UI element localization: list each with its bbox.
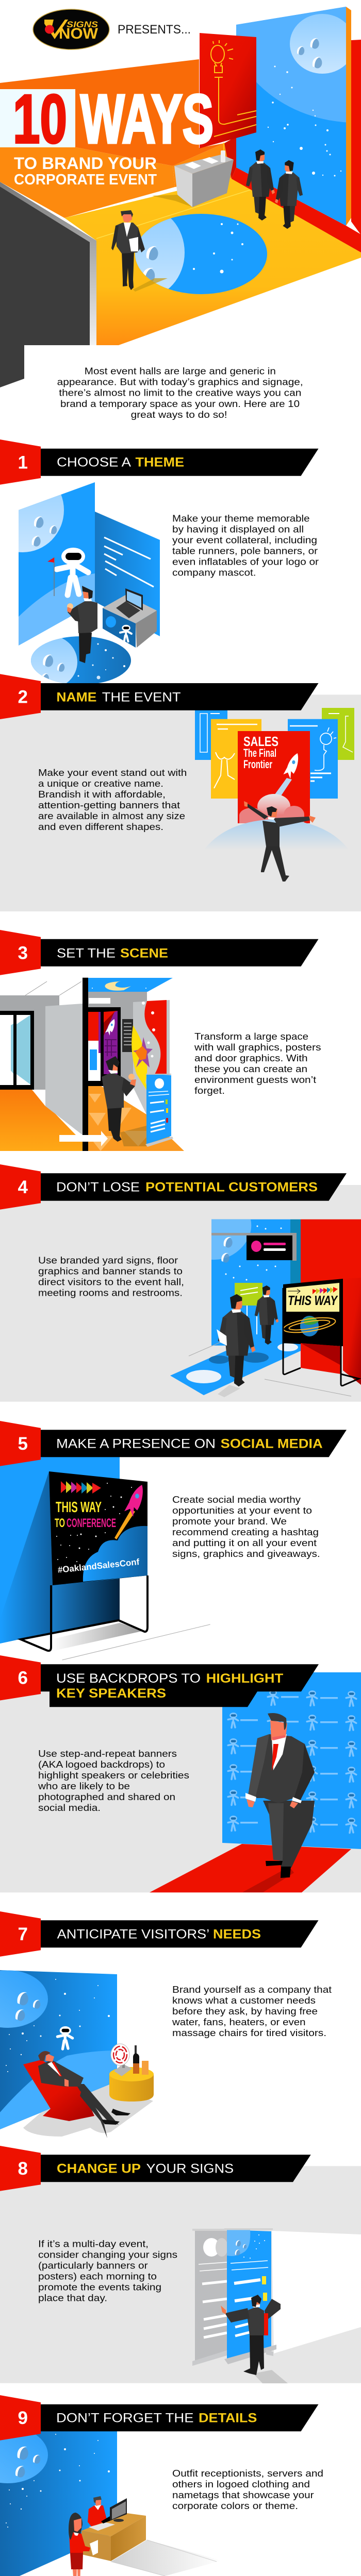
right theme wall with lines [95,512,160,636]
black banner: #OaklandSalesConf [57,1557,140,1575]
text 7: before they ask, by having free [172,2006,318,2016]
banner frame [21,1575,147,1651]
heading 4: 4 [18,1177,28,1197]
side table [109,2061,154,2102]
red wall [301,1219,361,1343]
text 3: with wall graphics, posters [194,1042,321,1053]
text 7: Brand yourself as a company that [172,1985,332,1995]
text 7: knows what a customer needs [172,1995,316,2006]
arrows [61,1481,101,1494]
text 8: place that day. [38,2293,107,2303]
heading 9: DETAILS [199,2411,257,2426]
glass [142,2061,149,2075]
text 1: by having it displayed on all [172,524,304,535]
heading 2: THE EVENT [102,690,180,705]
text 9 [172,2468,323,2511]
blue banner [224,2228,276,2364]
heading 3: SET THE [57,946,116,960]
red sign panel with light bulb [200,33,256,152]
flag [47,557,54,596]
wall shadow [0,1471,53,1643]
heading 6: HIGHLIGHT [206,1671,283,1686]
text 7 [172,1985,332,2038]
text 9: corporate colors or theme. [172,2501,298,2511]
illustration 2: banners [195,708,354,882]
title [0,81,214,188]
blue cloud [83,1526,147,1582]
intro paragraph: there’s almost no limit to the creative ways you can [59,388,301,398]
space wall [0,2421,117,2576]
businessman facing wall [246,149,275,221]
intro paragraph: brand a temporary space as your own. Here are 10 [60,399,300,409]
floor shadow [23,2084,153,2137]
left theme wall [19,482,95,646]
man shadow [133,278,168,292]
text 1: Make your theme memorable [172,514,309,524]
dark grey wall [0,182,96,387]
heading 4 [0,1164,347,1210]
red banner [238,731,310,823]
text 3: forget. [194,1086,225,1096]
text 1: table runners, pole banners, or [172,546,318,556]
man at back [255,1285,278,1345]
heading 4: DON’T LOSE [56,1180,140,1194]
text 4: direct visitors to the event hall, [38,1277,184,1287]
text 6: who are likely to be [38,1781,130,1791]
astronaut [57,2026,73,2049]
text 4 [38,1256,184,1298]
back wall over door [88,992,147,1086]
floor line [62,1624,210,1660]
heading 9 [0,2395,319,2441]
heading 5: SOCIAL MEDIA [221,1436,323,1451]
teal strip [290,1219,301,1346]
businessman front [111,210,145,290]
lower backing panel [53,1579,120,1632]
text 6 [38,1749,189,1813]
orange floor left [0,1090,83,1151]
blue wall [0,1453,120,1643]
grey banner [192,2229,228,2366]
text 5: promote your brand. We [172,1516,287,1527]
text 7: massage chairs for tired visitors. [172,2028,326,2038]
floor walkway [170,1326,351,1396]
heading 4: POTENTIAL CUSTOMERS [145,1180,318,1194]
man with cup [102,1056,136,1142]
astronaut logos [228,1690,356,1833]
illustration 5: social media banner [0,1453,210,1660]
text 2: and even different shapes. [38,822,163,832]
text 1 [172,514,319,578]
heading 2: NAME [56,690,96,705]
paper [217,1329,227,1346]
title: 10 [13,81,67,158]
text 1: even inflatables of your logo or [172,557,319,567]
step and repeat backdrop [222,1672,361,1849]
illustration 8: changing banners [192,2228,288,2383]
text 8: (particularly banners or [38,2261,148,2271]
text 5: and putting it on all your event [172,1538,317,1548]
grey pillar [45,1004,83,1135]
text 2: Brandish it with affordable, [38,789,166,800]
text 4: meeting rooms and restrooms. [38,1288,183,1298]
blue banner left [195,708,227,760]
roll-up banner [145,1074,173,1147]
text 6: photographed and shared on [38,1792,175,1802]
hanging sign [211,1233,297,1261]
text 4: graphics and banner stands to [38,1266,183,1277]
blue floor graphic [135,214,267,294]
red floor band [232,167,361,252]
text 3: these you can create an [194,1064,307,1074]
logo: Signs Now [33,9,109,49]
heading 3 [0,930,319,975]
text 5 [172,1495,320,1559]
red carpet [150,1844,351,1892]
intro paragraph: Most event halls are large and generic in [85,366,276,377]
text 3: environment guests won’t [194,1075,316,1085]
man changing banner [221,2295,281,2375]
text 8: If it’s a multi-day event, [38,2239,149,2249]
panel 4 background [0,1185,361,1402]
man relaxing [38,2051,130,2138]
text 1: company mascot. [172,568,256,578]
wires [25,981,81,995]
blue banner right [288,719,338,799]
heading 9: DON’T FORGET THE [56,2411,194,2426]
orange floor [0,147,175,218]
presents text: PRESENTS... [118,23,191,37]
green sign [235,1283,262,1334]
intro paragraph: appearance. But with today’s graphics and signage, [57,377,303,387]
man with drink [67,586,97,663]
blue moon wall [236,7,346,226]
text 5: signs, graphics and giveaways. [172,1549,320,1559]
night ceiling [88,978,173,992]
bottle [133,2045,139,2074]
green banner right [322,708,354,760]
text 5: recommend creating a hashtag [172,1527,319,1537]
door frame with posters [88,1007,121,1086]
woman with tablet [69,2513,98,2576]
this way sign: THIS WAY [288,1293,338,1308]
text 7: water, fans, heaters, or even [172,2017,305,2027]
red side wall [351,40,361,235]
heading 6: KEY SPEAKERS [56,1686,166,1701]
heading 6: 6 [18,1668,28,1688]
businessman facing wall 2 [275,160,303,229]
text 5: opportunities at your event to [172,1505,312,1516]
heading 5 [0,1421,347,1466]
heading 6: USE BACKDROPS TO [56,1671,201,1686]
text 9: Outfit receptionists, servers and [172,2468,323,2479]
heading 5: 5 [18,1434,28,1454]
red banner: Frontier [243,758,272,771]
blue wall [211,1219,290,1346]
heading 8: YOUR SIGNS [146,2162,234,2176]
illustration 1: theme booth [19,482,160,683]
wall graphic with stars [132,1000,170,1114]
computer [89,2498,127,2531]
shadow [218,1385,240,1397]
intro paragraph: great ways to do so! [131,410,227,420]
title: CORPORATE EVENT [14,172,157,188]
orange wall side [346,7,351,226]
hero illustration [0,0,361,387]
heading 7: 7 [18,1924,28,1944]
man foreground [218,1294,255,1386]
text 2: a unique or creative name. [38,778,163,789]
this way sign [283,1278,361,1386]
illustration 9: reception [0,2421,222,2576]
yellow banner [211,719,261,799]
text 8 [38,2239,177,2303]
heading 6 [0,1655,319,1707]
heading 7: NEEDS [213,1927,261,1941]
text 1: your event collateral, including [172,535,317,546]
text 6: social media. [38,1803,101,1813]
tiled floor [88,1086,184,1151]
heading 3: SCENE [120,946,168,960]
fan [111,2044,129,2065]
receptionist man [88,2496,107,2529]
orange wall [0,59,224,166]
speaker [245,1713,315,1878]
title: TO BRAND YOUR [14,154,157,173]
text 6: Use step-and-repeat banners [38,1749,177,1759]
astronaut [57,548,88,595]
illustration 7: lounge [0,1970,154,2138]
text 2: are available in almost any size [38,811,185,821]
text 2 [38,768,187,832]
text 8: promote the events taking [38,2282,161,2293]
hill [204,819,349,850]
keypad [122,1019,133,1052]
heading 1: CHOOSE A [57,455,131,470]
floor shadow [52,1623,144,1651]
heading 7 [0,1911,319,1957]
text 9: nametags that showcase your [172,2490,314,2500]
black post [83,978,88,1151]
illustration 4: wayfinding [170,1219,361,1397]
text 3: and door graphics. With [194,1053,308,1063]
heading 8: 8 [18,2159,28,2179]
white corner [32,1090,45,1106]
text 8: posters) each morning to [38,2272,157,2282]
heading 7: ANTICIPATE VISITORS’ [57,1927,209,1941]
man with arms wide [244,801,316,882]
podium [152,150,234,207]
massage chair [23,2060,94,2121]
heading 5: MAKE A PRESENCE ON [56,1436,216,1451]
heading 8: CHANGE UP [57,2162,141,2176]
text 3: Transform a large space [194,1031,308,1042]
intro paragraph [57,366,303,420]
white wall wedge [272,2231,361,2353]
logo: Signs Now: NOW [59,25,99,42]
left glass door [0,1011,34,1090]
text 5: Create social media worthy [172,1495,301,1505]
text 6: highlight speakers or celebrities [38,1770,189,1781]
text 4: Use branded yard signs, floor [38,1256,178,1266]
heading 9: 9 [18,2408,28,2428]
rocket and smoke [239,753,304,823]
black banner: TO [55,1516,65,1530]
text 8: consider changing your signs [38,2250,177,2260]
yellow floor stripe [96,190,251,239]
heading 1: THEME [135,455,184,470]
black banner [49,1471,147,1585]
table with laptop [103,588,157,648]
panel 6 background [0,1682,361,1892]
text 2: attention-getting banners that [38,800,180,810]
floor lines [0,2540,222,2576]
logo: Signs Now: SIGNS [67,20,99,29]
floor moon graphic [31,636,131,683]
text 6: (AKA logoed backdrops) to [38,1759,165,1770]
shadow [253,2370,288,2383]
panel 8 background [0,2166,361,2383]
text 3 [194,1031,321,1096]
text 2: Make your event stand out with [38,768,187,778]
heading 2 [0,674,319,719]
heading 2: 2 [18,687,28,707]
pink rocket [114,1485,143,1539]
heading 1 [0,439,319,485]
heading 8 [0,2146,311,2191]
yellow floor [64,178,361,345]
dark red pillar [224,137,236,179]
heading 3: 3 [18,943,28,963]
text 9: others in logoed clothing and [172,2479,310,2489]
black banner: CONFERENCE [67,1516,116,1530]
grey wall left [0,995,59,1011]
title: WAYS [80,81,214,158]
illustration 3: venue [0,978,184,1151]
heading 1: 1 [18,452,28,472]
desk [81,2513,146,2561]
black banner: THIS WAY [56,1499,102,1516]
panel 2 background [0,694,361,911]
direction arrow [59,1131,108,1146]
space wall [0,1970,117,2133]
red banner: SALES [243,734,278,749]
red banner: The Final [243,747,276,759]
